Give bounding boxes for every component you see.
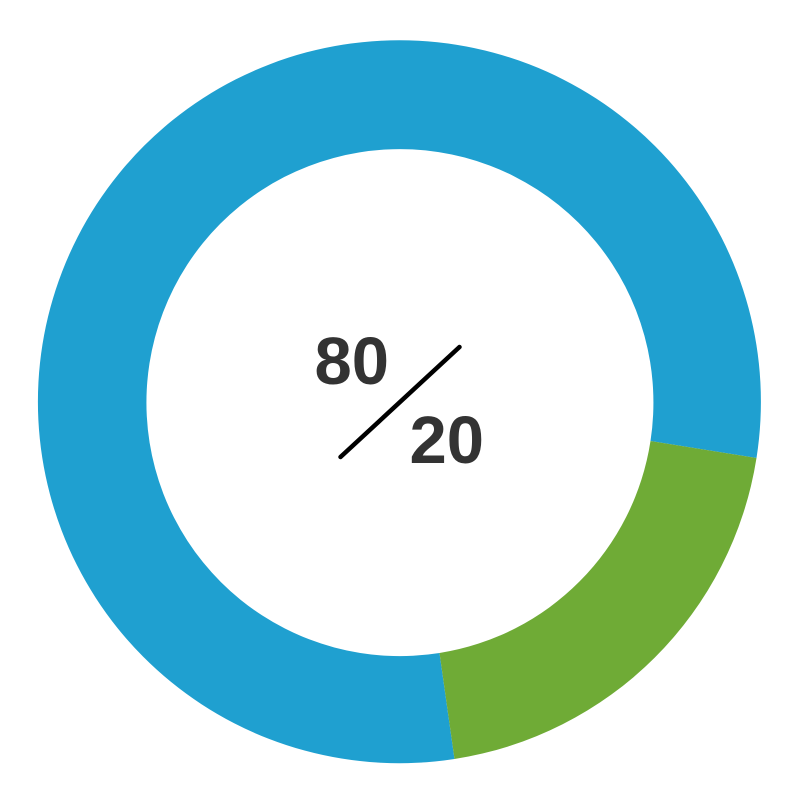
slash divider [340, 347, 460, 457]
center label: 80 over 20 [314, 324, 484, 478]
number: 80: 80 [314, 324, 389, 399]
segment: green 20 percent [440, 441, 756, 759]
number: 20: 20 [410, 403, 484, 478]
